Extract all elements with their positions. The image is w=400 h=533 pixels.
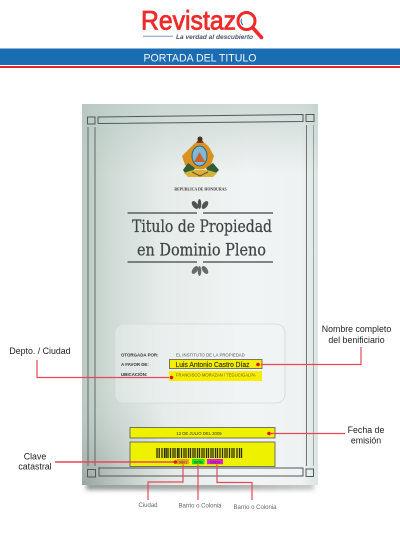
document: property title cover <box>82 104 318 490</box>
emblem: coat of arms of Honduras <box>182 136 219 177</box>
callout: department and city <box>9 346 173 379</box>
logo: Revistazo <box>141 6 262 41</box>
bottom rule <box>128 261 273 263</box>
logo wordmark: Revistaz <box>141 6 236 36</box>
callout: barrio o colonia center <box>178 464 222 510</box>
top flourish <box>190 199 210 210</box>
document title: en Dominio Pleno <box>137 240 266 260</box>
cadastral key box <box>130 442 275 466</box>
callout: beneficiary name <box>256 324 391 366</box>
banner heading: PORTADA DEL TITULO <box>144 52 257 64</box>
labels: A FAVOR DE: <box>121 362 149 367</box>
location: FRANCISCO MORAZAN / TEGUCIGALPA <box>176 372 256 378</box>
emblem caption: REPUBLICA DE HONDURAS <box>174 188 227 192</box>
labels: OTORGADA POR: <box>121 353 159 358</box>
callout: barrio o colonia center: Barrio o Colonia <box>178 504 222 510</box>
code: ciudad: 0801 <box>179 460 187 464</box>
callout: issue date: emisión <box>351 436 381 446</box>
beneficiary name <box>170 360 262 369</box>
labels: UBICACIÓN: <box>121 372 148 377</box>
top rule <box>128 212 273 214</box>
callout: issue date <box>267 425 384 446</box>
callout: department and city: Depto. / Ciudad <box>9 346 71 356</box>
callout: beneficiary name: del benificiario <box>328 335 385 345</box>
callout: barrio o colonia right: Barrio o Colonia <box>233 505 277 511</box>
labels <box>121 353 159 377</box>
callout: beneficiary name: Nombre completo <box>322 324 391 334</box>
icon: magnifying glass <box>238 12 262 38</box>
logo tagline: La verdad al descubierto <box>176 34 253 41</box>
callout: ciudad <box>138 464 183 509</box>
document ornamental border <box>88 114 314 477</box>
callout: cadastral key <box>18 452 177 472</box>
callout: ciudad: Ciudad <box>138 503 158 509</box>
location <box>169 371 262 381</box>
callout: cadastral key: Clave <box>24 452 46 462</box>
section banner <box>0 48 400 68</box>
callout: barrio o colonia right <box>217 464 277 511</box>
details panel <box>115 324 285 403</box>
beneficiary name: Luis Antonio Castro Díaz <box>176 362 250 369</box>
code: barrio <box>192 459 204 464</box>
barcode <box>157 448 242 458</box>
document title: Titulo de Propiedad <box>132 217 272 237</box>
bottom flourish <box>190 265 210 276</box>
code: colonia <box>207 459 223 464</box>
callout: issue date: Fecha de <box>348 425 384 435</box>
code: colonia: 00014 <box>210 460 220 464</box>
document title <box>132 217 272 260</box>
callout: cadastral key: catastral <box>18 462 52 472</box>
code: barrio: 0078 <box>194 460 202 464</box>
date box: 12 DE JULIO DEL 2005 <box>176 431 222 436</box>
date box <box>130 428 275 438</box>
issuer: EL INSTITUTO DE LA PROPIEDAD <box>176 353 245 358</box>
code: ciudad <box>177 459 189 464</box>
